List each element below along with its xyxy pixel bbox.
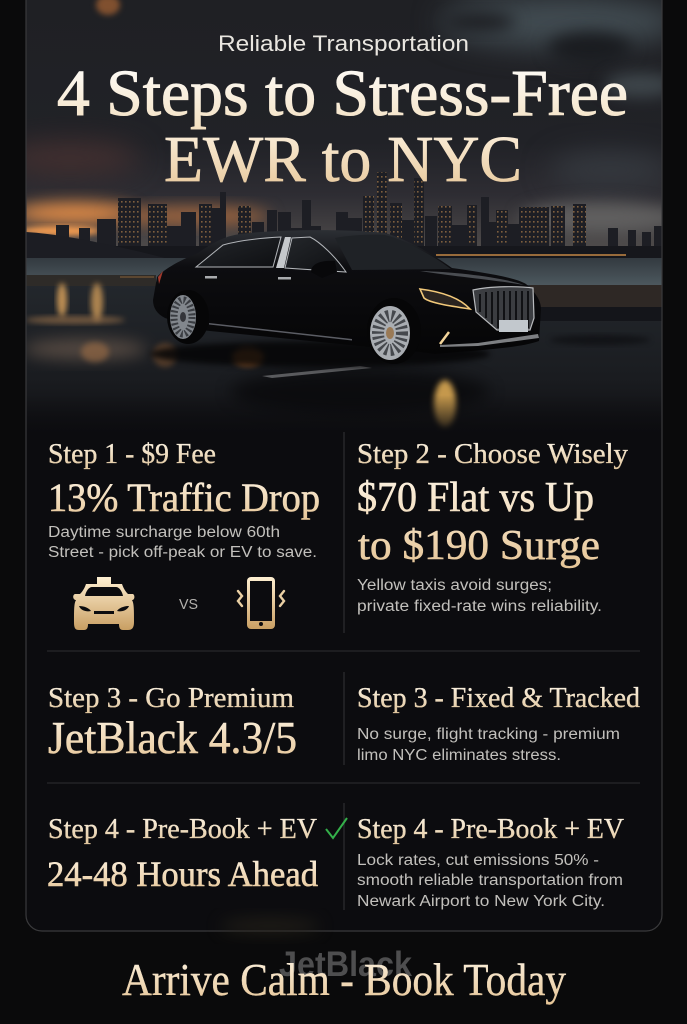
- city skyline: [26, 172, 662, 259]
- rear wheel: [167, 295, 206, 344]
- step 4 heading: Step 4 - Pre-Book + EV: [48, 813, 317, 845]
- step 1 stat: 13% Traffic Drop: [48, 475, 320, 520]
- booking window stat: 24-48 Hours Ahead: [47, 854, 318, 894]
- header text: [57, 31, 628, 196]
- road reflections: [23, 283, 650, 428]
- step 4 right block: [357, 813, 624, 910]
- step 1 heading: Step 1 - $9 Fee: [48, 438, 216, 470]
- step 4 left block: [47, 813, 347, 894]
- panel: hero photo: [0, 0, 680, 440]
- icon: taxi: [73, 577, 134, 630]
- title: [57, 57, 628, 196]
- vs label: VS: [179, 596, 198, 613]
- step 4 description: Newark Airport to New York City.: [357, 893, 605, 910]
- card background: [26, 433, 662, 931]
- step 3 description: No surge, flight tracking - premium: [357, 726, 620, 743]
- fade into card: [431, 397, 459, 432]
- river: [26, 258, 662, 285]
- bumper trim: [440, 332, 539, 347]
- hood highlight: [420, 271, 524, 285]
- car body: [153, 230, 541, 354]
- sunset glow: [15, 202, 680, 236]
- step 2 stat: to $190 Surge: [358, 523, 600, 569]
- step 1 block: [48, 438, 320, 630]
- brand watermark: JetBlack: [279, 945, 412, 984]
- wet road: [26, 285, 662, 410]
- eyebrow: Reliable Transportation: [218, 31, 469, 56]
- step 1 description: Street - pick off-peak or EV to save.: [48, 544, 317, 561]
- step 3 right block: [357, 682, 640, 764]
- step 2 heading: Step 2 - Choose Wisely: [357, 438, 628, 470]
- footer: [122, 945, 566, 1005]
- icon: phone: [238, 577, 284, 629]
- windshield: [335, 235, 451, 270]
- front wheel: [370, 306, 410, 360]
- step 4 ev heading: Step 4 - Pre-Book + EV: [357, 813, 624, 845]
- step 4 description: Lock rates, cut emissions 50% -: [357, 852, 599, 869]
- step 3 heading: Step 3 - Go Premium: [48, 682, 294, 714]
- grille: [473, 287, 534, 330]
- step 2 description: private fixed-rate wins reliability.: [357, 598, 602, 615]
- number plate: [499, 320, 528, 332]
- side windows: [196, 237, 346, 272]
- headlight: [420, 289, 470, 309]
- limousine: [153, 230, 541, 364]
- mirror: [311, 261, 337, 272]
- step 2 stat: $70 Flat vs Up: [357, 475, 594, 521]
- step 1 description: Daytime surcharge below 60th: [48, 524, 280, 541]
- step 4 description: smooth reliable transportation from: [357, 872, 623, 889]
- icon: green check: [326, 818, 347, 838]
- door handles and sill: [205, 276, 352, 340]
- title: 4 Steps to Stress-Free: [57, 57, 628, 130]
- storm clouds: [0, 0, 680, 188]
- sky: [26, 0, 662, 260]
- rating stat: JetBlack 4.3/5: [48, 712, 297, 763]
- step 3 description: limo NYC eliminates stress.: [357, 747, 561, 764]
- sea wall: [26, 275, 662, 321]
- step 3 left block: [48, 682, 297, 763]
- title: EWR to NYC: [164, 123, 522, 196]
- taillight: [158, 271, 163, 284]
- call to action: Arrive Calm - Book Today: [122, 954, 566, 1005]
- step 2 block: [357, 438, 628, 615]
- step 3 fixed heading: Step 3 - Fixed & Tracked: [357, 682, 640, 714]
- step 2 description: Yellow taxis avoid surges;: [357, 577, 552, 594]
